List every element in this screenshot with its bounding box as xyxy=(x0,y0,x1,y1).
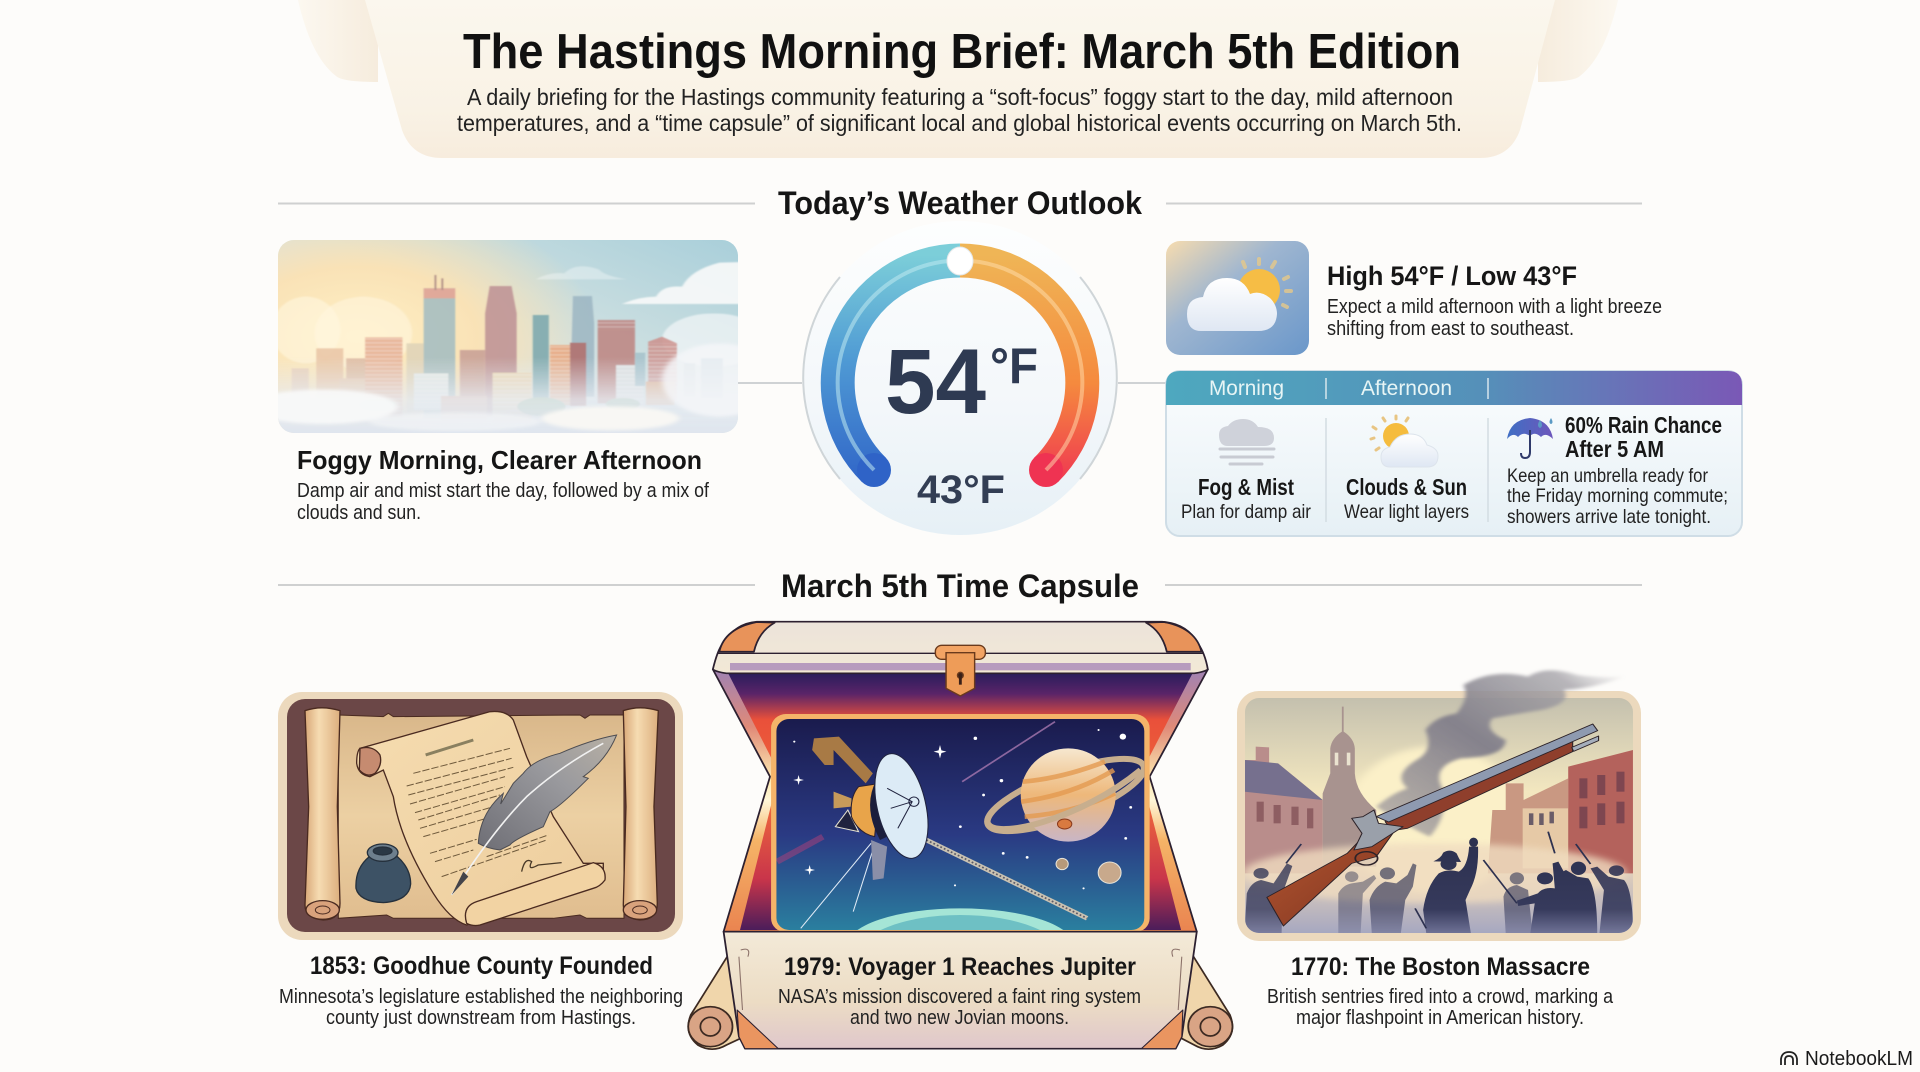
ink bottle xyxy=(356,844,411,903)
left buildings xyxy=(1245,747,1323,873)
text: rain chance: showers arrive late tonight. xyxy=(1507,506,1711,528)
text: voyager xyxy=(778,953,1141,1029)
subtitle xyxy=(457,84,1462,136)
right buildings xyxy=(1488,778,1568,873)
text: goodhue county: Minnesota’s legislature established the neighboring xyxy=(279,986,683,1008)
text: rain chance xyxy=(1507,412,1728,528)
chest scroll ends xyxy=(688,955,1232,1049)
text: foggy morning xyxy=(297,445,709,524)
title: The Hastings Morning Brief: March 5th Edition xyxy=(463,25,1461,79)
document xyxy=(357,711,603,925)
text: boston massacre: 1770: The Boston Massacre xyxy=(1291,953,1590,981)
text: high and low: shifting from east to southeast. xyxy=(1327,318,1574,340)
text: boston massacre: British sentries fired into a crowd, marking a xyxy=(1267,986,1614,1008)
text: goodhue county xyxy=(279,952,683,1029)
text: foggy morning: Damp air and mist start the day, followed by a mix of xyxy=(297,480,709,502)
text: voyager: 1979: Voyager 1 Reaches Jupiter xyxy=(784,953,1136,981)
chest clasp xyxy=(935,645,985,696)
high value: 54 xyxy=(885,331,986,433)
panel: scroll illustration xyxy=(278,692,683,940)
text: goodhue county: county just downstream from Hastings. xyxy=(326,1007,636,1029)
icon: clouds and sun xyxy=(1371,416,1438,467)
text: rain chance: Keep an umbrella ready for xyxy=(1507,465,1708,487)
heading: weather: Today’s Weather Outlook xyxy=(778,185,1142,221)
label: morning: Morning xyxy=(1209,377,1284,400)
text: high and low xyxy=(1327,261,1662,340)
NotebookLM mark: NotebookLM xyxy=(1805,1048,1913,1070)
text: rain chance: the Friday morning commute; xyxy=(1507,485,1728,507)
jupiter xyxy=(984,748,1144,842)
gauge arc: cool side xyxy=(838,260,960,487)
text: clouds and sun: Wear light layers xyxy=(1344,501,1469,523)
text: rain chance: After 5 AM xyxy=(1565,436,1664,462)
text: high and low: Expect a mild afternoon with a light breeze xyxy=(1327,296,1662,318)
label: afternoon: Afternoon xyxy=(1361,377,1452,400)
text: fog and mist: Fog & Mist xyxy=(1198,474,1294,500)
text: clouds and sun xyxy=(1344,474,1469,523)
chest lid xyxy=(713,622,1208,673)
space panel xyxy=(771,714,1150,931)
panel: boston illustration xyxy=(1237,670,1641,941)
header banner xyxy=(298,0,1618,158)
connector lines xyxy=(738,382,1167,384)
panel: treasure chest xyxy=(688,622,1232,1049)
temperature gauge xyxy=(803,221,1117,535)
icon: umbrella xyxy=(1507,418,1553,458)
text: rain chance: 60% Rain Chance xyxy=(1565,412,1722,438)
chest rim xyxy=(713,669,1208,932)
panel: forecast table xyxy=(1166,371,1742,536)
text: foggy morning: clouds and sun. xyxy=(297,502,421,524)
musket smoke xyxy=(1376,670,1624,837)
text: boston massacre: major flashpoint in American history. xyxy=(1296,1007,1584,1029)
text: voyager: and two new Jovian moons. xyxy=(850,1007,1069,1029)
low value: 43°F xyxy=(917,468,1005,512)
chest interior xyxy=(728,673,1192,930)
text: goodhue county: 1853: Goodhue County Founded xyxy=(310,952,653,980)
high unit: °F xyxy=(990,338,1038,394)
feather xyxy=(452,735,617,895)
text: clouds and sun: Clouds & Sun xyxy=(1346,474,1467,500)
parchment backdrop xyxy=(338,713,624,918)
text: boston massacre xyxy=(1267,953,1614,1029)
heading: time capsule: March 5th Time Capsule xyxy=(781,568,1139,604)
text: fog and mist xyxy=(1181,474,1311,523)
voyager probe xyxy=(801,737,1087,928)
chest front xyxy=(724,932,1197,1049)
text: voyager: NASA’s mission discovered a faint ring system xyxy=(778,986,1141,1008)
gauge arc: warm side xyxy=(960,260,1082,487)
text: high and low: High 54°F / Low 43°F xyxy=(1327,261,1577,291)
left roller xyxy=(305,708,340,920)
subtitle: temperatures, and a “time capsule” of significant local and global historical events occurring on March 5th. xyxy=(457,110,1462,136)
right roller xyxy=(623,708,658,920)
crowd xyxy=(1245,838,1633,933)
icon: sun and cloud tile xyxy=(1166,241,1309,355)
icon: fog cloud xyxy=(1219,419,1274,464)
text: fog and mist: Plan for damp air xyxy=(1181,501,1311,523)
subtitle: A daily briefing for the Hastings community featuring a “soft-focus” foggy start to the day, mild afternoon xyxy=(467,84,1453,110)
panel: foggy skyline image xyxy=(278,240,738,433)
gauge knob xyxy=(947,247,973,275)
musket xyxy=(1267,724,1599,926)
text: foggy morning: Foggy Morning, Clearer Afternoon xyxy=(297,445,702,475)
